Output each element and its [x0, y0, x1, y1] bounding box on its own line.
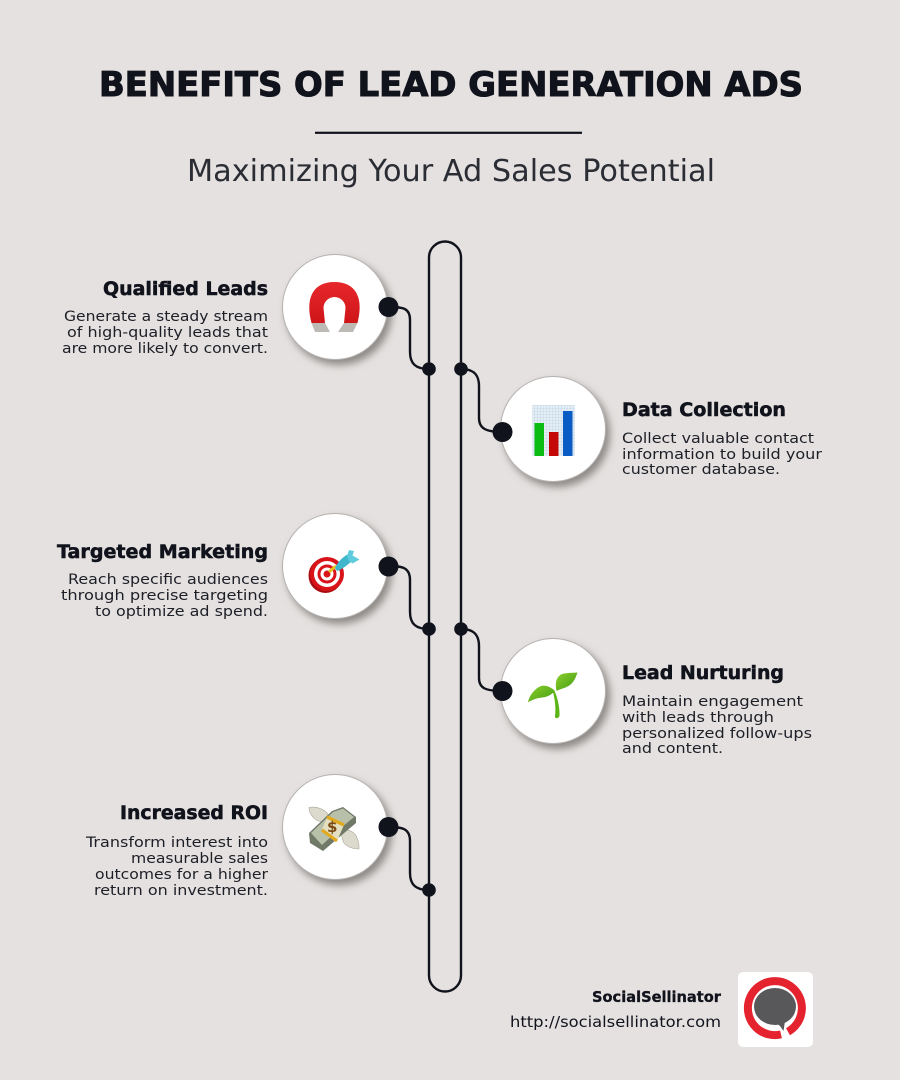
text: targeted marketing: through precise targeting	[61, 588, 268, 604]
text: targeted marketing: Reach specific audiences	[68, 572, 268, 588]
text: lead nurturing	[622, 694, 812, 757]
connector: increased roi	[378, 817, 436, 897]
logo	[738, 972, 813, 1047]
text: data collection	[622, 431, 822, 478]
icon: magnet	[282, 254, 388, 360]
text: data collection: information to build your	[622, 447, 822, 463]
text: lead nurturing: with leads through	[622, 710, 774, 726]
text: data collection: Collect valuable contact	[622, 431, 814, 447]
footer brand name: SocialSellinator	[592, 988, 722, 1006]
icon: bar chart	[500, 376, 606, 482]
text: increased roi	[85, 835, 268, 899]
panel: qualified leads	[62, 254, 436, 376]
icon: sprout	[500, 638, 606, 744]
panel: data collection	[454, 362, 822, 482]
text: targeted marketing	[61, 572, 268, 620]
heading: targeted marketing: Targeted Marketing	[57, 541, 268, 563]
heading: qualified leads: Qualified Leads	[103, 278, 268, 300]
text: lead nurturing: and content.	[622, 741, 723, 757]
text: qualified leads: are more likely to convert.	[62, 341, 268, 357]
text: increased roi: Transform interest into	[85, 835, 268, 851]
panel: increased roi	[85, 774, 436, 899]
icon: money with wings: $	[327, 818, 337, 836]
text: targeted marketing: to optimize ad spend.	[95, 604, 268, 620]
text: qualified leads: Generate a steady stream	[64, 309, 268, 325]
text: data collection: customer database.	[622, 462, 780, 478]
text: increased roi: return on investment.	[94, 883, 268, 899]
text: increased roi: measurable sales	[131, 851, 268, 867]
panel: targeted marketing	[57, 514, 436, 636]
text: qualified leads	[62, 309, 268, 357]
heading: lead nurturing: Lead Nurturing	[622, 662, 784, 684]
text: qualified leads: of high-quality leads that	[67, 325, 268, 341]
connector: data collection	[454, 362, 512, 442]
panel: lead nurturing	[454, 622, 812, 757]
text: lead nurturing: Maintain engagement	[622, 694, 803, 710]
icon: target and dart	[282, 514, 388, 618]
connector: targeted marketing	[378, 556, 436, 636]
footer url: http://socialsellinator.com	[510, 1013, 721, 1031]
connector: lead nurturing	[454, 622, 512, 701]
heading: increased roi: Increased ROI	[120, 802, 268, 824]
text: lead nurturing: personalized follow-ups	[622, 726, 812, 742]
title: BENEFITS OF LEAD GENERATION ADS	[99, 65, 803, 105]
text: increased roi: outcomes for a higher	[95, 867, 268, 883]
icon: money with wings	[282, 774, 388, 880]
subtitle: Maximizing Your Ad Sales Potential	[187, 154, 715, 189]
connector: qualified leads	[378, 297, 436, 376]
timeline track	[429, 242, 461, 992]
heading: data collection: Data Collection	[622, 399, 786, 421]
